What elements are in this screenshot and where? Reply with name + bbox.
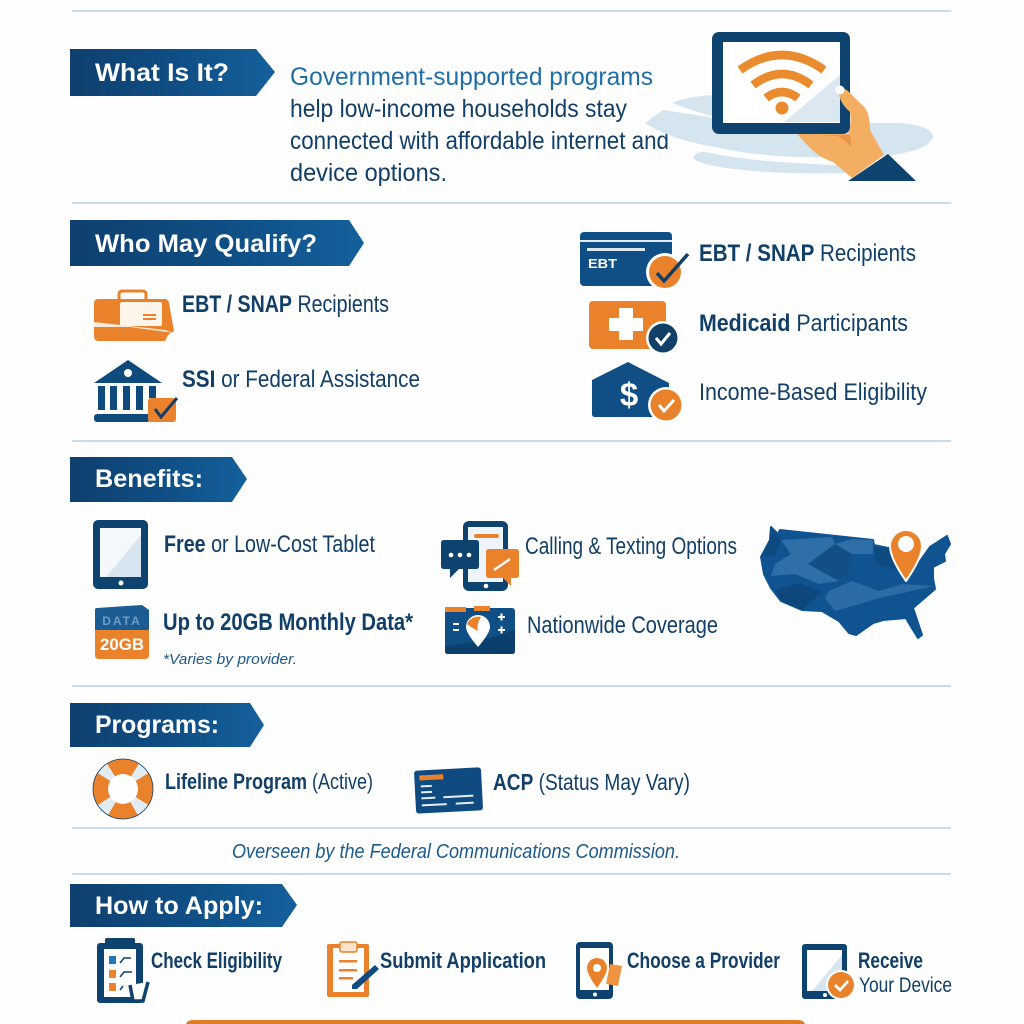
text block: description: Government-supported programs: [290, 63, 653, 91]
text block: description: [290, 63, 669, 187]
label: Up to 20GB Monthly Data: Up to 20GB Monthly Data*: [163, 609, 414, 636]
icon: calling and texting: [441, 521, 519, 591]
icon: tablet: [93, 520, 148, 589]
label: Nationwide Coverage: Nationwide Coverage: [527, 612, 718, 639]
heading: Who May Qualify?: [70, 220, 364, 266]
icon: ACP card: [414, 767, 483, 814]
label: Receive Your Device: [858, 948, 952, 997]
icon: phone with pin: [576, 942, 622, 999]
heading: What Is It?: What Is It?: [95, 59, 229, 87]
label: EBT / SNAP Recipients: EBT / SNAP Recipients: [182, 291, 389, 318]
map: United States with location pin: [761, 527, 950, 638]
note: FCC oversight: Overseen by the Federal Communications Commission.: [232, 841, 680, 863]
text block: description: help low-income households stay: [290, 95, 627, 123]
label: Check Eligibility: Check Eligibility: [151, 948, 283, 973]
icon: checklist: [97, 938, 148, 1003]
icon: income house with dollar: [592, 362, 684, 423]
panel: benefits: [70, 457, 950, 668]
label: SSI or Federal Assistance: SSI or Federal Assistance: [182, 366, 420, 393]
icon: income house with dollar: $: [620, 376, 638, 413]
panel: programs: [70, 703, 690, 819]
call to action bar: [186, 1020, 805, 1024]
icon: 20GB data card: 20GB: [100, 635, 144, 654]
heading: Benefits: Benefits:: [95, 465, 203, 493]
label: Receive Your Device: Receive: [858, 948, 923, 973]
text block: description: connected with affordable internet and: [290, 127, 669, 155]
panel: who may qualify: [70, 220, 927, 423]
heading: Programs: Programs:: [95, 711, 219, 739]
label: Receive Your Device: Your Device: [859, 974, 952, 997]
icon: hand holding tablet with wifi: [645, 32, 933, 181]
heading: Programs: [70, 703, 264, 747]
heading: Benefits: [70, 457, 247, 502]
icon: EBT card with check: [580, 232, 688, 291]
icon: EBT card with check: EBT: [588, 256, 617, 271]
heading: Who May Qualify?: Who May Qualify?: [95, 230, 317, 258]
label: Free or Low-Cost Tablet: Free or Low-Cost Tablet: [164, 531, 375, 558]
icon: medicaid cross: [589, 301, 680, 355]
panel: what is it: [70, 32, 933, 187]
label: ACP status: ACP (Status May Vary): [493, 769, 690, 795]
icon: briefcase: [94, 291, 174, 341]
icon: 20GB data card: [95, 605, 149, 659]
panel: how to apply: [70, 884, 952, 1003]
icon: clipboard with pen: [327, 942, 379, 997]
label: Lifeline Program (Active): Lifeline Program (Active): [165, 769, 373, 794]
heading: How to Apply: [70, 884, 297, 927]
label: Calling and Texting Options: Calling & Texting Options: [525, 533, 737, 560]
label: EBT / SNAP Recipients right: EBT / SNAP Recipients: [699, 240, 916, 267]
text block: description: device options.: [290, 159, 447, 187]
label: Submit Application: Submit Application: [380, 948, 546, 973]
label: Choose a Provider: Choose a Provider: [627, 948, 780, 973]
label: Medicaid Participants: Medicaid Participants: [699, 310, 908, 337]
icon: federal building with check: [94, 360, 177, 422]
icon: tablet with check: [802, 944, 856, 1000]
footnote: *Varies by provider.: [163, 651, 297, 668]
icon: nationwide coverage: [445, 606, 515, 654]
heading: How to Apply: How to Apply:: [95, 892, 263, 920]
heading: What Is It?: [70, 49, 275, 96]
icon: lifebuoy: [93, 759, 153, 819]
icon: 20GB data card: DATA: [102, 614, 142, 628]
label: Income-Based Eligibility: Income-Based Eligibility: [699, 379, 927, 406]
